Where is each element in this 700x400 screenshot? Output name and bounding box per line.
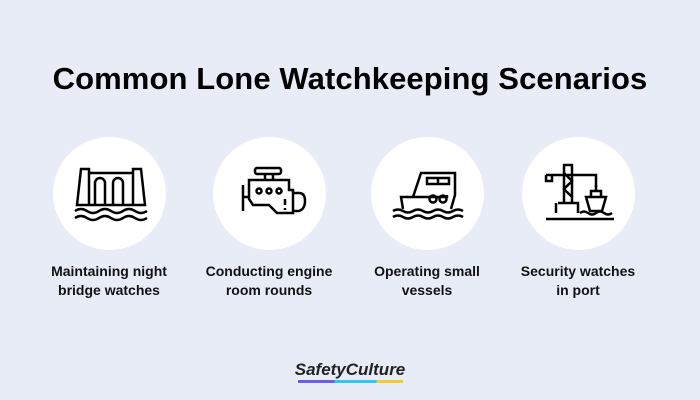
icon: dam [52,137,166,250]
label: room rounds [226,282,312,298]
icon: crane and ship [522,137,634,250]
title: Common Lone Watchkeeping Scenarios [53,61,647,96]
label [51,263,167,298]
item: port security [521,137,635,298]
label: bridge watches [58,282,160,298]
item: bridge watches [51,137,167,298]
label: vessels [402,282,452,298]
item: small vessels [371,137,484,298]
label: in port [556,282,600,298]
logo: SafetyCulture [295,360,405,379]
label [206,263,332,298]
icon: engine [212,137,326,250]
icon: boat [370,137,484,250]
label: Maintaining night [51,263,167,279]
label: Security watches [521,263,635,279]
logo underline [298,380,402,383]
label [374,263,480,298]
label: Operating small [374,263,480,279]
label [521,263,635,298]
label: Conducting engine [206,263,332,279]
item: engine rounds [206,137,332,298]
